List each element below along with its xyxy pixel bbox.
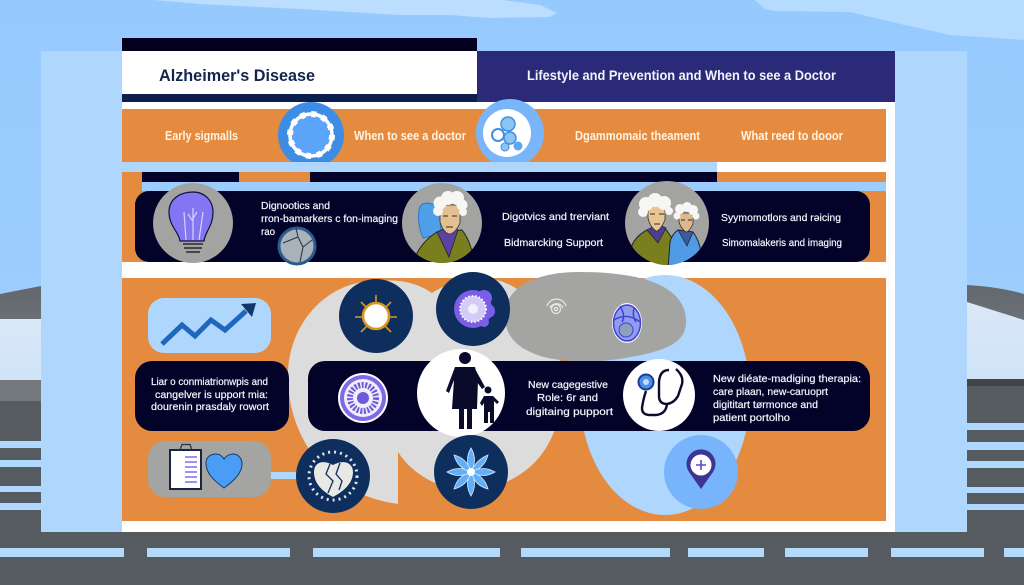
text: diagnostics block: Dignootics and (261, 200, 330, 212)
icon: blue cells circle (476, 99, 544, 167)
panel: divider strips (122, 162, 886, 262)
icon: signal waves (547, 299, 566, 314)
card: caregiver text (135, 361, 289, 431)
background: sky (0, 0, 1024, 300)
icon: elderly woman portrait (402, 183, 482, 268)
text: new caregiver role: Role: 6r and (537, 392, 598, 404)
connector: card to heart circle (271, 472, 301, 479)
text: new therapies (713, 373, 861, 424)
icon: ring circle (278, 102, 344, 168)
text: new therapies: digititart tørmonce and (713, 399, 818, 411)
text: digestives block: Bidmarcking Support (504, 237, 603, 249)
icon: location pin circle (664, 435, 738, 509)
icon: sun circle (339, 279, 413, 353)
text: new therapies: care plaan, new-caruoprt (713, 386, 828, 398)
panel: central dark bar (308, 361, 870, 431)
background: right hill and land (967, 285, 1024, 386)
card: clipboard and heart (148, 441, 271, 497)
text: new caregiver role: New cagegestive (528, 379, 608, 391)
text: new caregiver role (526, 379, 613, 418)
card: caregiver text: cangelver is upport mia: (155, 389, 268, 401)
shape: light blue ellipse (580, 275, 750, 515)
panel: white sheet (122, 51, 895, 532)
text: digestives block: Digotvics and trerviant (502, 211, 609, 223)
icon: stethoscope (623, 359, 695, 431)
icon: cracked circle (279, 228, 315, 264)
card: caregiver text: dourenin prasdaly rowort (151, 401, 269, 413)
label: what need to do: What reed to dooor (741, 129, 843, 143)
icon: blue brain (612, 303, 642, 343)
header: right title block (477, 51, 895, 102)
icon: parent and child (417, 349, 505, 437)
panel: main backdrop (41, 51, 967, 532)
shape: grey blob with icons (505, 272, 686, 361)
background: left hill and land (0, 286, 41, 401)
shape: light grey speech bubble (288, 278, 562, 504)
icon: broken heart circle (296, 439, 370, 513)
header: left title block (122, 38, 477, 102)
title: Alzheimer's Disease (159, 67, 315, 85)
text: diagnostics block: rao (261, 226, 275, 238)
text: digestives block (502, 211, 609, 249)
text: new caregiver role: digitaing pupport (526, 406, 613, 418)
card: caregiver text: Liar o conmiatrionwpis and (151, 376, 268, 388)
icon: elderly couple portrait (625, 181, 709, 270)
text: symptoms block (721, 212, 842, 249)
text: new therapies: New diéate-madiging therapia: (713, 373, 861, 385)
card: trend chart (148, 298, 271, 353)
label: early signals: Early sigmalls (165, 129, 238, 143)
icon: light bulb (153, 183, 233, 263)
icon: blue flower circle (434, 435, 508, 509)
background: road (0, 380, 1024, 585)
icon: purple badge (338, 373, 388, 423)
icon: purple cell circle (436, 272, 510, 346)
text: new therapies: patient portolho (713, 412, 790, 424)
panel: top orange band (122, 109, 886, 162)
label: when to see a doctor: When to see a doctor (354, 129, 466, 143)
panel: dark row (135, 191, 870, 262)
text: symptoms block: Syymomotlors and rəicing (721, 212, 841, 224)
subtitle: Lifestyle and Prevention and When to see a Doctor (527, 67, 837, 83)
label: diagnostic treatment: Dgammomaic theament (575, 129, 701, 143)
text: symptoms block: Simomalakeris and imaging (722, 237, 842, 249)
panel: lower orange area (122, 278, 886, 521)
text: diagnostics block: rron-bamarkers c fon-imaging (261, 213, 398, 225)
text: diagnostics block (261, 200, 398, 238)
